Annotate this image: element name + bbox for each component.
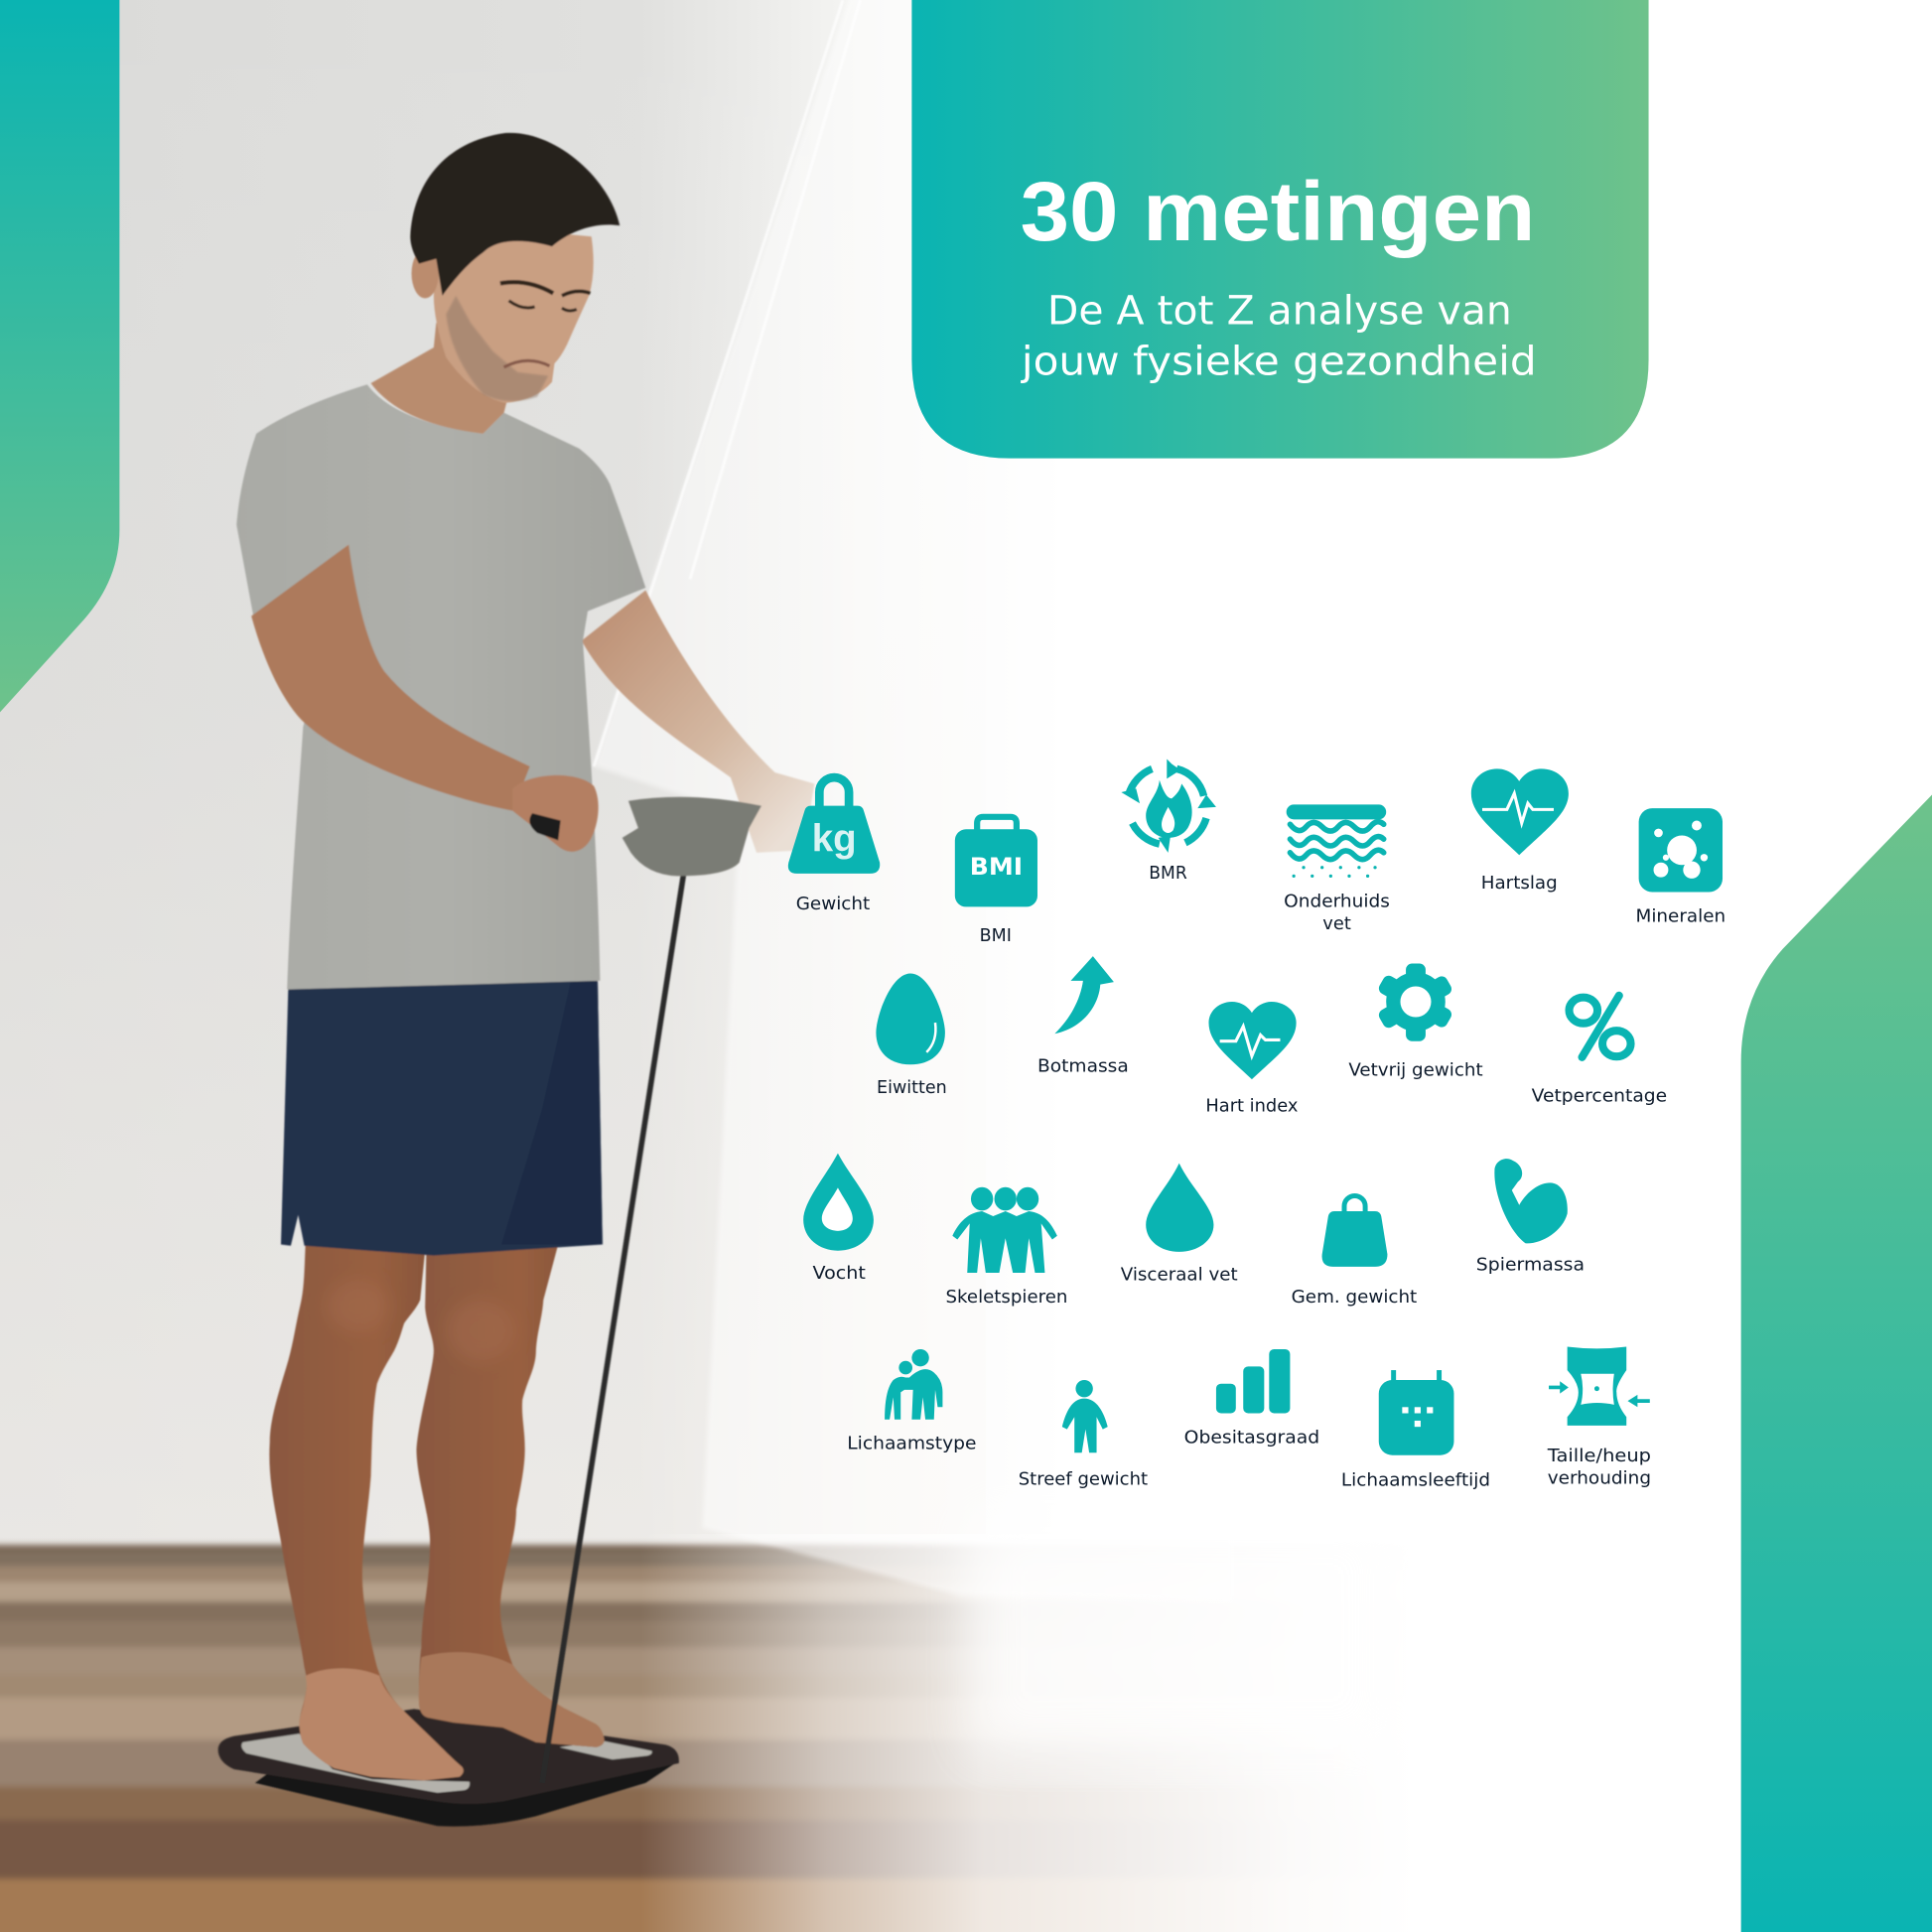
metric: Onderhuids vet: [1284, 804, 1390, 934]
metric: Vocht: Vocht: [812, 1263, 866, 1284]
metric: Gewicht: kg: [812, 818, 857, 861]
metric: Eiwitten: [876, 973, 947, 1098]
metric: Skeletspieren: [946, 1187, 1067, 1308]
wooden floor: [0, 1516, 1749, 1932]
metric: BMR: BMR: [1149, 863, 1187, 884]
metric: Taille/heup verhouding: [1547, 1346, 1651, 1488]
metric: Spiermassa: [1476, 1159, 1585, 1276]
metric: Mineralen: Mineralen: [1636, 905, 1725, 926]
title: 30 metingen: [1021, 165, 1535, 258]
handle grey: [622, 797, 761, 876]
far arm: [582, 590, 814, 853]
metric: Lichaamsleeftijd: [1341, 1370, 1490, 1491]
stubble: [446, 296, 548, 401]
mouth: [504, 360, 550, 367]
metric: Onderhuids vet: vet: [1322, 913, 1351, 934]
metric: Vocht: [803, 1154, 874, 1284]
handle grip: [529, 813, 561, 840]
metric: Taille/heup verhouding: verhouding: [1548, 1467, 1651, 1488]
knee highlights: [326, 1279, 515, 1363]
t-shirt: [236, 384, 645, 990]
subtitle line 2: jouw fysieke gezondheid: [1021, 339, 1537, 384]
metric: Vetpercentage: [1532, 996, 1667, 1107]
man figure: [218, 133, 814, 1827]
metric: BMI: BMI: [980, 925, 1012, 946]
sheer curtain: [594, 0, 1232, 1601]
near arm: [251, 545, 530, 811]
metric: Obesitasgraad: Obesitasgraad: [1184, 1427, 1319, 1448]
metric: Hartslag: [1471, 768, 1569, 894]
eyes and brows: [500, 282, 590, 311]
metric: BMI: [955, 817, 1037, 946]
metric: Vetpercentage: Vetpercentage: [1532, 1086, 1667, 1107]
metric: Lichaamstype: Lichaamstype: [847, 1433, 977, 1453]
left corner shape: [0, 0, 119, 712]
metric: Visceraal vet: Visceraal vet: [1121, 1264, 1238, 1285]
metric: Botmassa: [1037, 956, 1129, 1077]
shorts: [281, 977, 603, 1256]
metric: Gewicht: Gewicht: [796, 894, 870, 914]
right side shape: [1741, 794, 1932, 1932]
metric: Gem. gewicht: [1292, 1195, 1417, 1308]
metric: Botmassa: Botmassa: [1037, 1056, 1129, 1077]
cable: [542, 873, 684, 1783]
metric: Lichaamstype: [847, 1349, 977, 1453]
metric: Gem. gewicht: Gem. gewicht: [1292, 1287, 1417, 1308]
metric: Spiermassa: Spiermassa: [1476, 1255, 1585, 1276]
header panel: [911, 0, 1649, 459]
metric: Obesitasgraad: [1184, 1349, 1319, 1448]
near leg: [269, 1242, 464, 1780]
metric: Vetvrij gewicht: Vetvrij gewicht: [1348, 1059, 1483, 1080]
metric: Lichaamsleeftijd: Lichaamsleeftijd: [1341, 1470, 1490, 1491]
metric: Skeletspieren: Skeletspieren: [946, 1287, 1067, 1308]
metric: Eiwitten: Eiwitten: [877, 1077, 947, 1098]
near hand: [512, 775, 599, 852]
metric: Streef gewicht: [1019, 1380, 1148, 1489]
metric: Streef gewicht: Streef gewicht: [1019, 1468, 1148, 1489]
far foot shading: [419, 1652, 605, 1747]
hair: [410, 133, 620, 296]
scale: [218, 1709, 679, 1827]
metric: Mineralen: [1636, 808, 1725, 926]
metric: Hart index: [1205, 1002, 1299, 1116]
metric: Hartslag: Hartslag: [1481, 873, 1558, 894]
shorts dark fold: [501, 977, 603, 1244]
ear: [412, 249, 439, 298]
metric: Hart index: Hart index: [1205, 1095, 1299, 1116]
subtitle line 1: De A tot Z analyse van: [1047, 288, 1512, 334]
metric: BMR: [1121, 759, 1216, 884]
metric: BMI: BMI: [970, 853, 1023, 881]
metric: Vetvrij gewicht: [1348, 964, 1483, 1080]
far leg: [416, 1244, 605, 1747]
metric: Onderhuids vet: Onderhuids: [1284, 891, 1390, 911]
near foot shading: [300, 1668, 464, 1780]
neck: [371, 323, 515, 434]
face: [434, 221, 594, 403]
metric: Gewicht: [788, 777, 880, 914]
metric: Visceraal vet: [1121, 1164, 1238, 1285]
metric: Taille/heup verhouding: Taille/heup: [1547, 1446, 1651, 1466]
